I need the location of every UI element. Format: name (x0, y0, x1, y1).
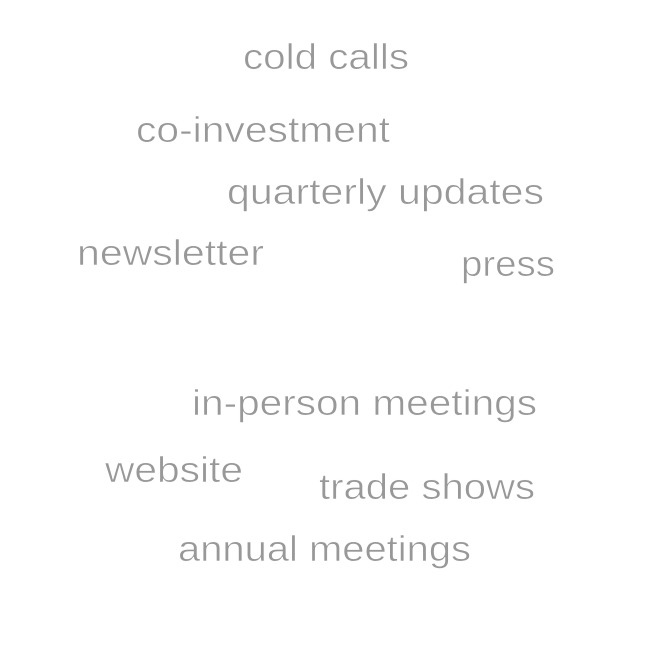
text: cold calls: cold calls (243, 36, 409, 77)
text: press: press (461, 243, 555, 284)
text: quarterly updates: quarterly updates (227, 171, 544, 212)
text: co-investment: co-investment (136, 109, 390, 150)
text: newsletter: newsletter (77, 232, 264, 273)
text: in-person meetings: in-person meetings (192, 382, 537, 423)
text: annual meetings: annual meetings (178, 528, 471, 569)
text: website: website (104, 449, 243, 490)
text: trade shows: trade shows (319, 466, 535, 507)
